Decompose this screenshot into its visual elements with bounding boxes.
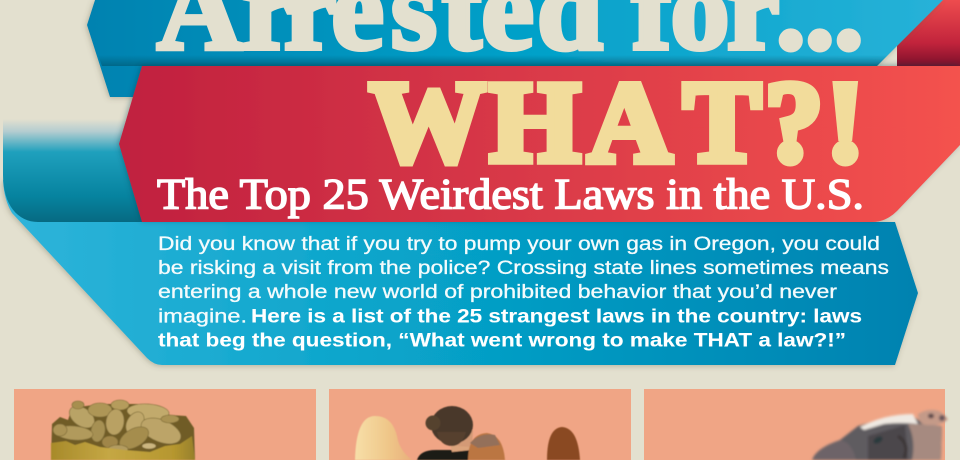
- intro text block: Here is a list of the 25 strangest laws in the country: laws: [251, 306, 862, 328]
- subtitle: The Top 25 Weirdest Laws in the U.S.: [157, 172, 864, 218]
- ribbon: blue top banner: [87, 0, 943, 97]
- photo: group from behind: [355, 406, 580, 460]
- intro text block: be risking a visit from the police? Crossing state lines sometimes means: [158, 258, 889, 279]
- ribbon fold: teal left: [3, 119, 150, 222]
- panel: pig: [644, 389, 948, 460]
- panel: group of women: [329, 389, 631, 460]
- intro text block: Did you know that if you try to pump your own gas in Oregon, you could: [158, 234, 880, 255]
- photo: pig head: [812, 410, 948, 460]
- intro text block: [158, 234, 889, 352]
- title: WHAT?!: WHAT?!: [370, 59, 865, 187]
- ribbon: red main banner: [119, 66, 960, 222]
- ribbon: blue lower intro banner: [3, 180, 918, 365]
- intro text block: entering a whole new world of prohibited behavior that you’d never: [158, 282, 838, 303]
- intro text block: imagine.: [158, 306, 247, 328]
- icon: bag of peanuts: [51, 400, 195, 460]
- panel: peanuts: [14, 389, 316, 460]
- intro text block: that beg the question, “What went wrong to make THAT a law?!”: [158, 330, 846, 352]
- ribbon fold: dark red top right: [897, 0, 960, 66]
